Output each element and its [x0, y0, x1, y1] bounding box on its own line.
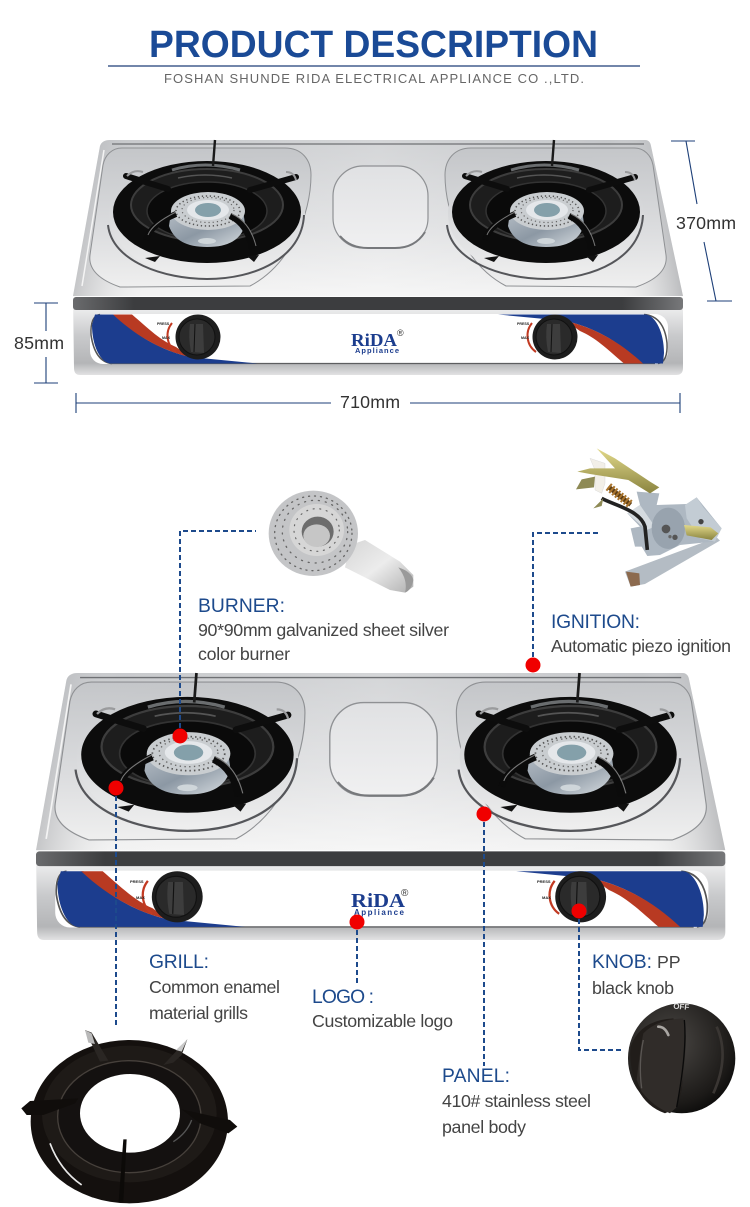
- callout: ignition: Automatic piezo ignition: [551, 636, 731, 656]
- callout: grill: material grills: [149, 1003, 248, 1023]
- callout: panel: 410# stainless steel: [442, 1091, 591, 1111]
- annotated stove labels: ®: [401, 888, 409, 899]
- part photo: burner: [269, 491, 413, 593]
- callout: logo: Customizable logo: [312, 1011, 453, 1031]
- callout: grill: [108, 780, 280, 1027]
- product photo: stove with dimensions view: [73, 140, 683, 375]
- annotated stove labels: [130, 879, 551, 917]
- callout: grill: Common enamel: [149, 977, 280, 997]
- callout: panel: panel body: [442, 1117, 526, 1137]
- callout: burner: color burner: [198, 644, 290, 664]
- dimension: 85mm: 85mm: [14, 333, 64, 353]
- annotated stove labels: PRESS: [537, 879, 551, 884]
- callout: ignition: IGNITION:: [551, 612, 640, 633]
- stove labels: Appliance: [355, 346, 399, 355]
- annotated stove labels: MAX: [136, 895, 145, 900]
- dimension: 710mm: 710mm: [340, 392, 400, 412]
- callout: logo: LOGO :: [312, 987, 374, 1008]
- callout: knob: [572, 904, 681, 1050]
- stove labels: PRESS: [517, 322, 530, 326]
- part photo: ignition valve: [576, 448, 722, 587]
- stove labels: [157, 322, 530, 355]
- callout: knob: KNOB: PP: [592, 952, 681, 973]
- annotated stove labels: MAX: [542, 895, 551, 900]
- product photo: annotated stove: [36, 673, 725, 940]
- callout: logo: [312, 914, 453, 1031]
- callout: panel: [442, 806, 591, 1137]
- dimension: height 370mm: [671, 141, 736, 301]
- callout: panel: PANEL:: [442, 1066, 510, 1087]
- callout: burner: BURNER:: [198, 596, 285, 617]
- part photo: grill: [21, 1030, 237, 1203]
- annotated stove labels: Appliance: [354, 908, 405, 917]
- callout: burner: [172, 531, 449, 744]
- callout: ignition: [526, 533, 731, 672]
- callout: burner: 90*90mm galvanized sheet silver: [198, 620, 449, 640]
- part photo: knob: OFF: [673, 1002, 690, 1012]
- stove labels: PRESS: [157, 322, 170, 326]
- annotated stove labels: PRESS: [130, 879, 144, 884]
- stove labels: MAX: [521, 336, 530, 340]
- annotated stove labels: RiDA: [351, 890, 406, 912]
- dimension: 710mm: [76, 392, 680, 413]
- title: PRODUCT DESCRIPTION: [149, 24, 598, 66]
- callout: knob: black knob: [592, 978, 674, 998]
- dimension: height 370mm: 370mm: [676, 213, 736, 233]
- dimension: 85mm: [14, 303, 64, 383]
- stove labels: ®: [397, 328, 404, 338]
- part photo: knob: [628, 1002, 735, 1113]
- callout: grill: GRILL:: [149, 952, 209, 973]
- stove labels: RiDA: [351, 330, 397, 350]
- stove labels: MAX: [162, 336, 171, 340]
- subtitle: FOSHAN SHUNDE RIDA ELECTRICAL APPLIANCE CO .,LTD.: [164, 71, 584, 86]
